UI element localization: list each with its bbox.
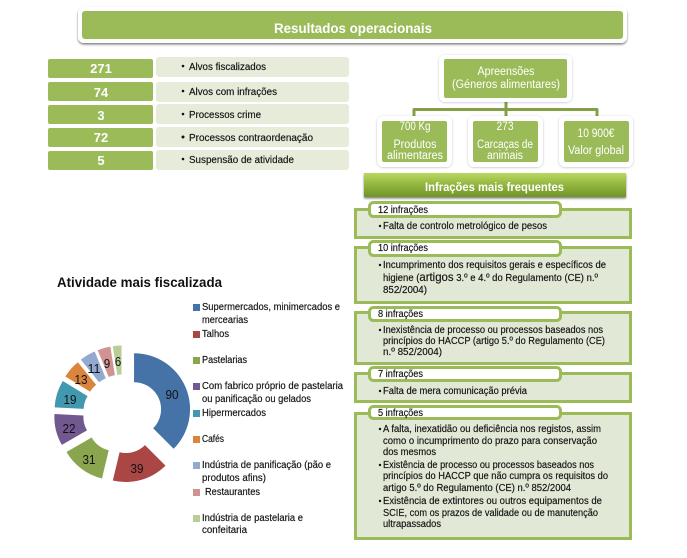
legend: indústria de panificação: Indústria de panificação (pão e [202,460,331,471]
legend: fabrico próprio [193,381,343,405]
panel: 10 infrações: 852/2004) [383,285,427,296]
slice: pastelarias 31: 31 [82,452,96,467]
panel: 8 infrações: n.º 852/2004) [383,347,442,358]
panel: 5 infrações: princípios do HACCP que não cumpra os requisitos do [383,471,608,482]
panel: 10 infrações: 10 infrações [378,243,428,254]
org chart: apreensões [377,55,633,167]
row: processos contraordenação: 72 [94,130,108,145]
slice: fabrico próprio 22: 22 [62,421,76,436]
panel: 5 infrações [356,406,630,538]
row: processos contraordenação [48,127,349,147]
legend: supermercados [193,302,340,326]
panel: 7 infrações: Falta de mera comunicação prévia [383,386,527,397]
row: processos crime: Processos crime [189,110,261,121]
panel: 12 infrações [356,202,630,238]
box: apreensões: Apreensões [478,66,535,78]
panel: 5 infrações: SCIE, com os prazos de validade ou de manutenção [383,508,598,519]
slice: talhos 39: 39 [130,461,144,476]
panel: 5 infrações: como o incumprimento do prazo para conservação [383,436,597,447]
slice: hipermercados 19: 19 [64,392,76,407]
legend: fabrico próprio: Com fabrico próprio de pastelaria [202,381,343,392]
panel: 5 infrações: dos mesmos [383,447,436,458]
row: alvos com infrações: Alvos com infrações [189,87,277,98]
legend: indústria de pastelaria: confeitaria [202,525,247,536]
panel: 5 infrações: 5 infrações [378,408,423,419]
legend: talhos: Talhos [202,329,229,340]
heading: infrações mais frequentes [364,173,626,197]
box: valor global: Valor global [568,145,624,157]
row: suspensão de atividade: 5 [97,153,105,168]
box: valor global [559,116,633,167]
row: suspensão de atividade [48,150,349,170]
donut chart [54,346,190,482]
panel: 5 infrações: Existência de extintores ou outros equipamentos de [383,496,602,507]
slice: cafés 13: 13 [74,372,88,387]
box: apreensões: (Géneros alimentares) [452,79,560,91]
box: produtos alimentares [377,116,452,167]
panel: 8 infrações [356,308,630,364]
row: suspensão de atividade: Suspensão de atividade [189,155,294,166]
title banner [78,7,627,43]
legend: hipermercados: Hipermercados [202,408,266,419]
row: alvos fiscalizados: 271 [90,61,112,76]
panel: 8 infrações: 8 infrações [378,309,423,320]
title: Resultados operacionais [274,21,432,36]
panel: 10 infrações: Incumprimento dos requisitos gerais e específicos de [383,260,606,271]
chart title: Atividade mais fiscalizada [57,274,222,290]
legend: fabrico próprio: ou panificação ou gelados [202,394,311,405]
panel: 7 infrações [356,368,630,402]
legend: supermercados: Supermercados, minimercados e [202,302,340,313]
panel: 5 infrações: artigo 5.º do Regulamento (CE) n.º 852/2004 [383,483,571,494]
box: carcaças de animais: animais [487,150,523,162]
legend: cafés [193,434,224,445]
box: produtos alimentares: 700 Kg [400,121,430,133]
slice: restaurantes 9: 9 [104,356,110,371]
row: processos crime: 3 [97,108,105,123]
chart legend [193,302,343,536]
panel: 8 infrações: princípios do HACCP (artigo 5.º do Regulamento (CE) [383,336,605,347]
panel: 10 infrações [356,242,630,302]
legend: indústria de panificação [193,460,331,484]
box: carcaças de animais: Carcaças de [477,139,533,151]
box: carcaças de animais [468,116,543,167]
box: apreensões [439,55,572,102]
legend: supermercados: mercearias [202,315,248,326]
legend: indústria de pastelaria: Indústria de pastelaria e [202,513,303,524]
row: processos contraordenação: Processos contraordenação [189,133,313,144]
panel: 12 infrações: 12 infrações [378,205,428,216]
panel: 5 infrações: A falta, inexatidão ou deficiência nos registos, assim [383,424,601,435]
legend: cafés: Cafés [202,434,224,445]
slice: indústria de pastelaria 6: 6 [115,354,121,369]
slice: supermercados 90: 90 [166,387,178,402]
panel: 7 infrações: 7 infrações [378,369,423,380]
panel: 12 infrações: Falta de controlo metrológico de pesos [383,221,547,232]
legend: restaurantes: Restaurantes [205,487,260,498]
box: valor global: 10 900€ [578,128,615,140]
row: alvos com infrações [48,82,349,102]
row: processos crime [48,104,349,124]
legend: indústria de panificação: produtos afins) [202,473,266,484]
panel: 10 infrações: higiene (artigos 3.º e 4.º do Regulamento (CE) n.º [383,270,598,284]
connector lines [414,98,597,116]
row: alvos fiscalizados: Alvos fiscalizados [189,62,266,73]
panel: 5 infrações: ultrapassados [383,519,441,530]
row: alvos fiscalizados [48,57,349,78]
box: carcaças de animais: 273 [496,121,514,133]
key figures list [48,57,349,170]
panel: 8 infrações: Inexistência de processo ou processos baseados nos [383,325,603,336]
heading: infrações mais frequentes: Infrações mais frequentes [425,180,564,194]
slice: indústria de panificação 11: 11 [88,361,100,376]
legend: indústria de pastelaria [193,513,303,536]
legend: pastelarias: Pastelarias [202,355,247,366]
row: alvos com infrações: 74 [94,85,109,100]
panel: 5 infrações: Existência de processo ou processos baseados nos [383,460,594,471]
box: produtos alimentares: Produtos [394,139,437,151]
box: produtos alimentares: alimentares [387,150,443,162]
